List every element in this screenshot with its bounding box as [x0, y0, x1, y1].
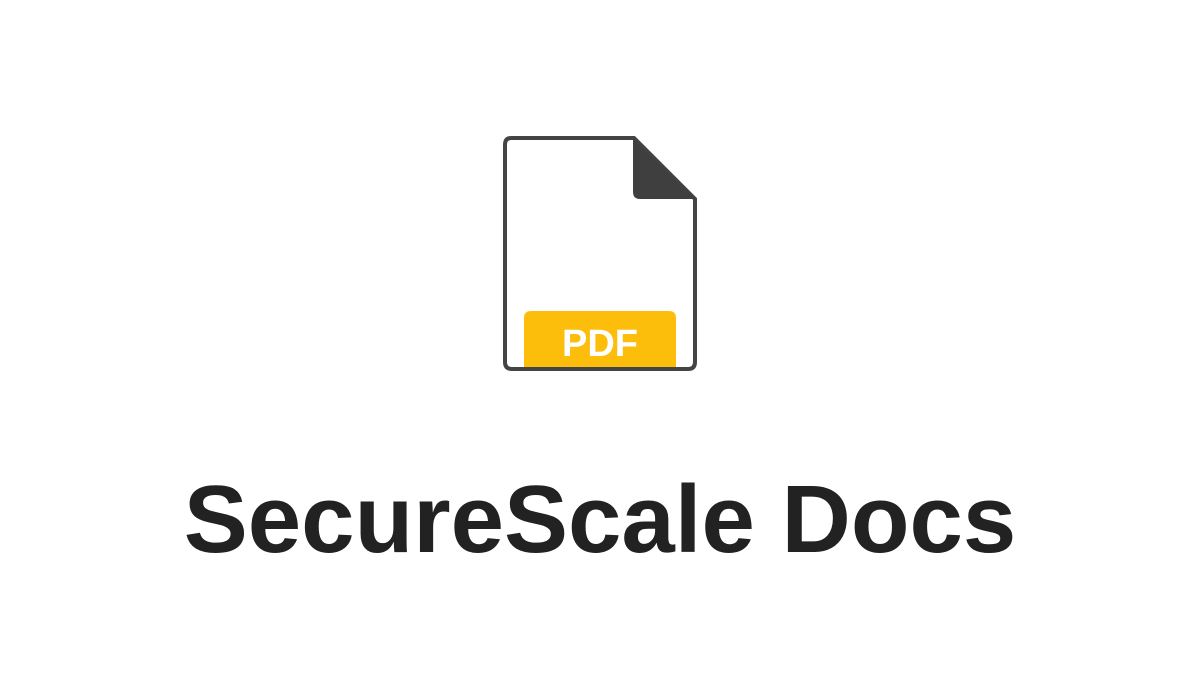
icon: pdf file: PDF — [562, 323, 638, 365]
title: SecureScale Docs — [184, 466, 1016, 573]
